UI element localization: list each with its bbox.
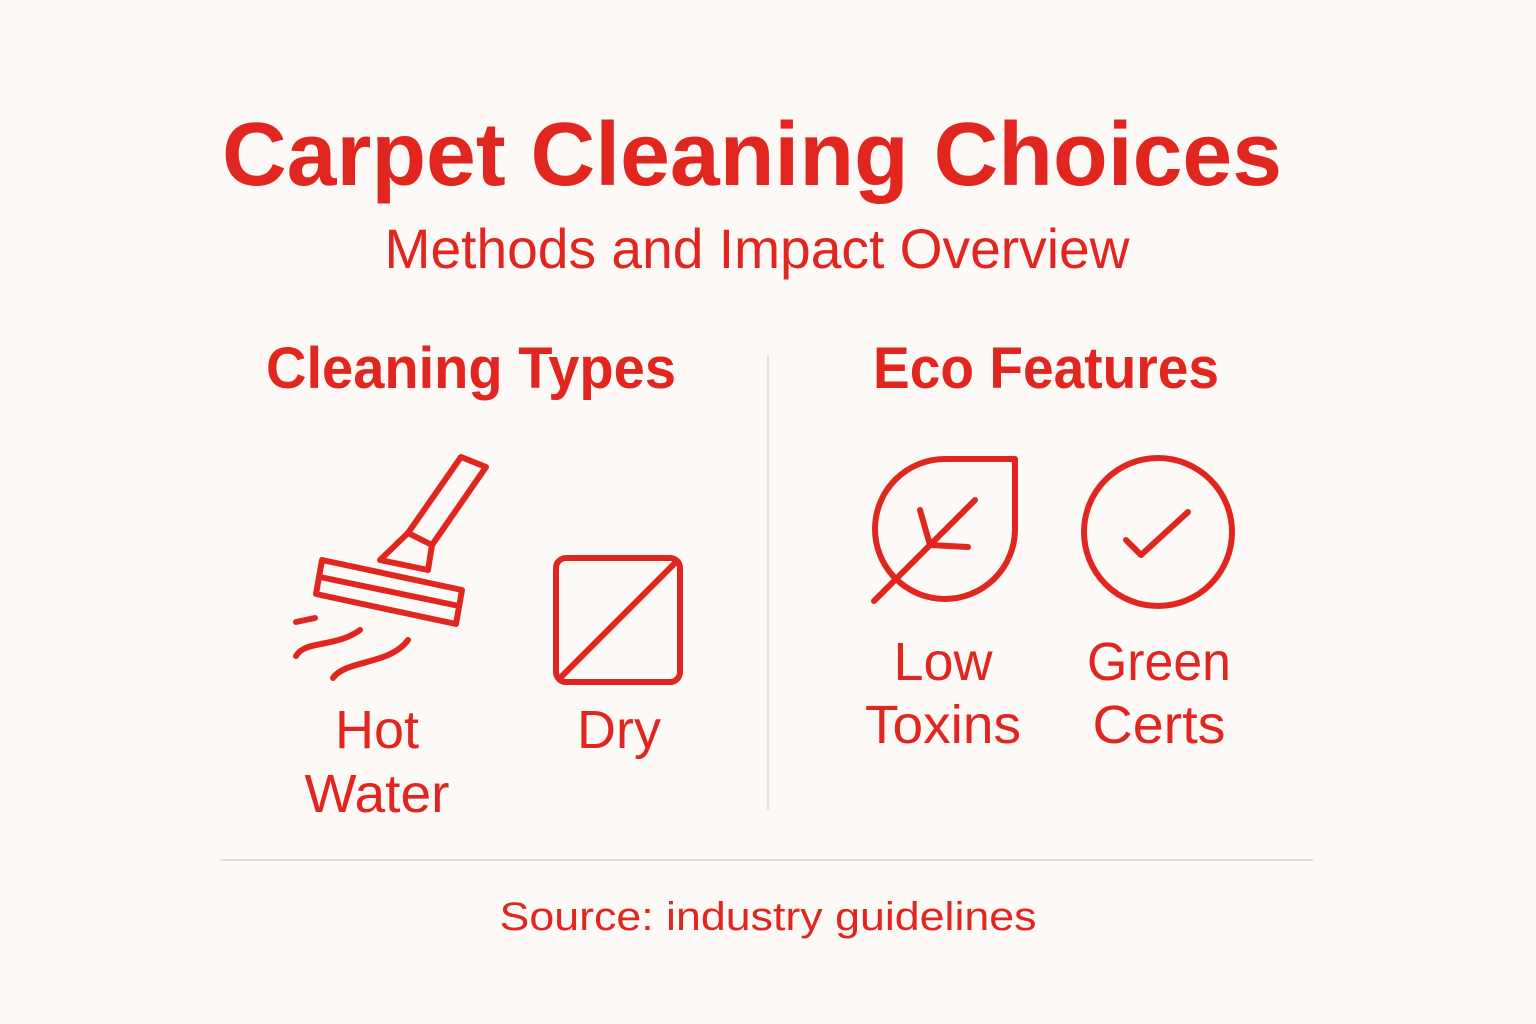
title: Carpet Cleaning Choices bbox=[222, 105, 1282, 205]
icon: dry square bbox=[556, 558, 680, 682]
divider: horizontal bbox=[220, 859, 1313, 861]
panel: eco features: Toxins bbox=[865, 695, 1021, 755]
label: hot water: Hot bbox=[335, 700, 419, 760]
heading: eco features: Eco Features bbox=[873, 336, 1219, 401]
heading: cleaning types: Cleaning Types bbox=[266, 336, 676, 401]
subtitle: Methods and Impact Overview bbox=[384, 217, 1130, 280]
panel: eco features: Certs bbox=[1092, 695, 1226, 755]
panel: cleaning types: Water bbox=[304, 764, 450, 824]
source: Source: industry guidelines bbox=[500, 895, 1036, 939]
panel: cleaning types bbox=[266, 336, 680, 824]
icon: check circle bbox=[1084, 458, 1232, 606]
label: dry: Dry bbox=[577, 700, 661, 760]
label: green certs: Green bbox=[1087, 632, 1231, 692]
label: low toxins: Low bbox=[893, 632, 994, 692]
divider: vertical bbox=[767, 355, 769, 810]
panel: eco features bbox=[865, 336, 1232, 755]
icon: leaf bbox=[874, 459, 1015, 601]
icon: squeegee bbox=[296, 457, 486, 678]
